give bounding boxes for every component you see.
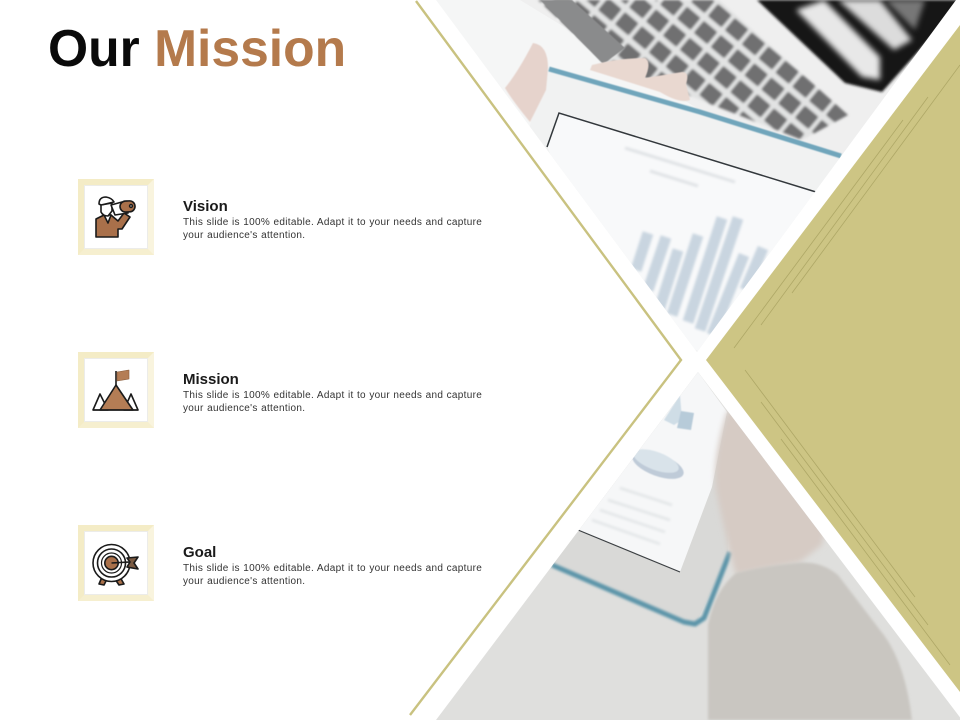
keyboard [538,0,848,140]
photo: tablet and sleeve, lower triangle [430,365,960,720]
bars on tablet [636,218,763,335]
text: mission: Mission [183,371,239,388]
blurred chart caption [625,148,735,186]
laptop screen [757,0,960,92]
text: goal: your audience's attention. [183,576,305,587]
small bars [664,395,694,430]
text: mission [183,371,482,414]
item: vision [78,179,482,255]
laptop body [520,0,960,165]
pie chart [632,449,684,480]
text: vision: Vision [183,198,228,215]
text: vision: This slide is 100% editable. Adapt it to your needs and capture [183,217,482,228]
tablet screen paper [547,113,816,352]
tablet frame [500,68,842,352]
text: goal: This slide is 100% editable. Adapt it to your needs and capture [183,563,482,574]
hand thumb [505,43,548,122]
text: goal [183,544,482,587]
icon: person with telescope [78,179,154,255]
item: goal [78,525,482,601]
sleeve [708,562,912,720]
icon: mountain flag [78,352,154,428]
gold chevron line [410,1,681,715]
photo and geometric panels [409,0,960,720]
text: mission: your audience's attention. [183,403,305,414]
title: Our Mission [48,19,346,77]
paper text lines [592,488,672,544]
photo: laptop and tablet, upper triangle [430,0,960,360]
text: vision: your audience's attention. [183,230,305,241]
item: mission [78,352,482,428]
text: vision [183,198,482,241]
wrist [715,400,830,575]
text: goal: Goal [183,544,216,561]
icon: target with arrow [78,525,154,601]
space bar [540,0,625,64]
olive panel [706,25,960,692]
text: mission: This slide is 100% editable. Adapt it to your needs and capture [183,390,482,401]
tablet paper [578,372,727,572]
tablet lower frame [554,531,578,562]
tablet blue edge [549,69,841,156]
fingers [590,58,690,101]
